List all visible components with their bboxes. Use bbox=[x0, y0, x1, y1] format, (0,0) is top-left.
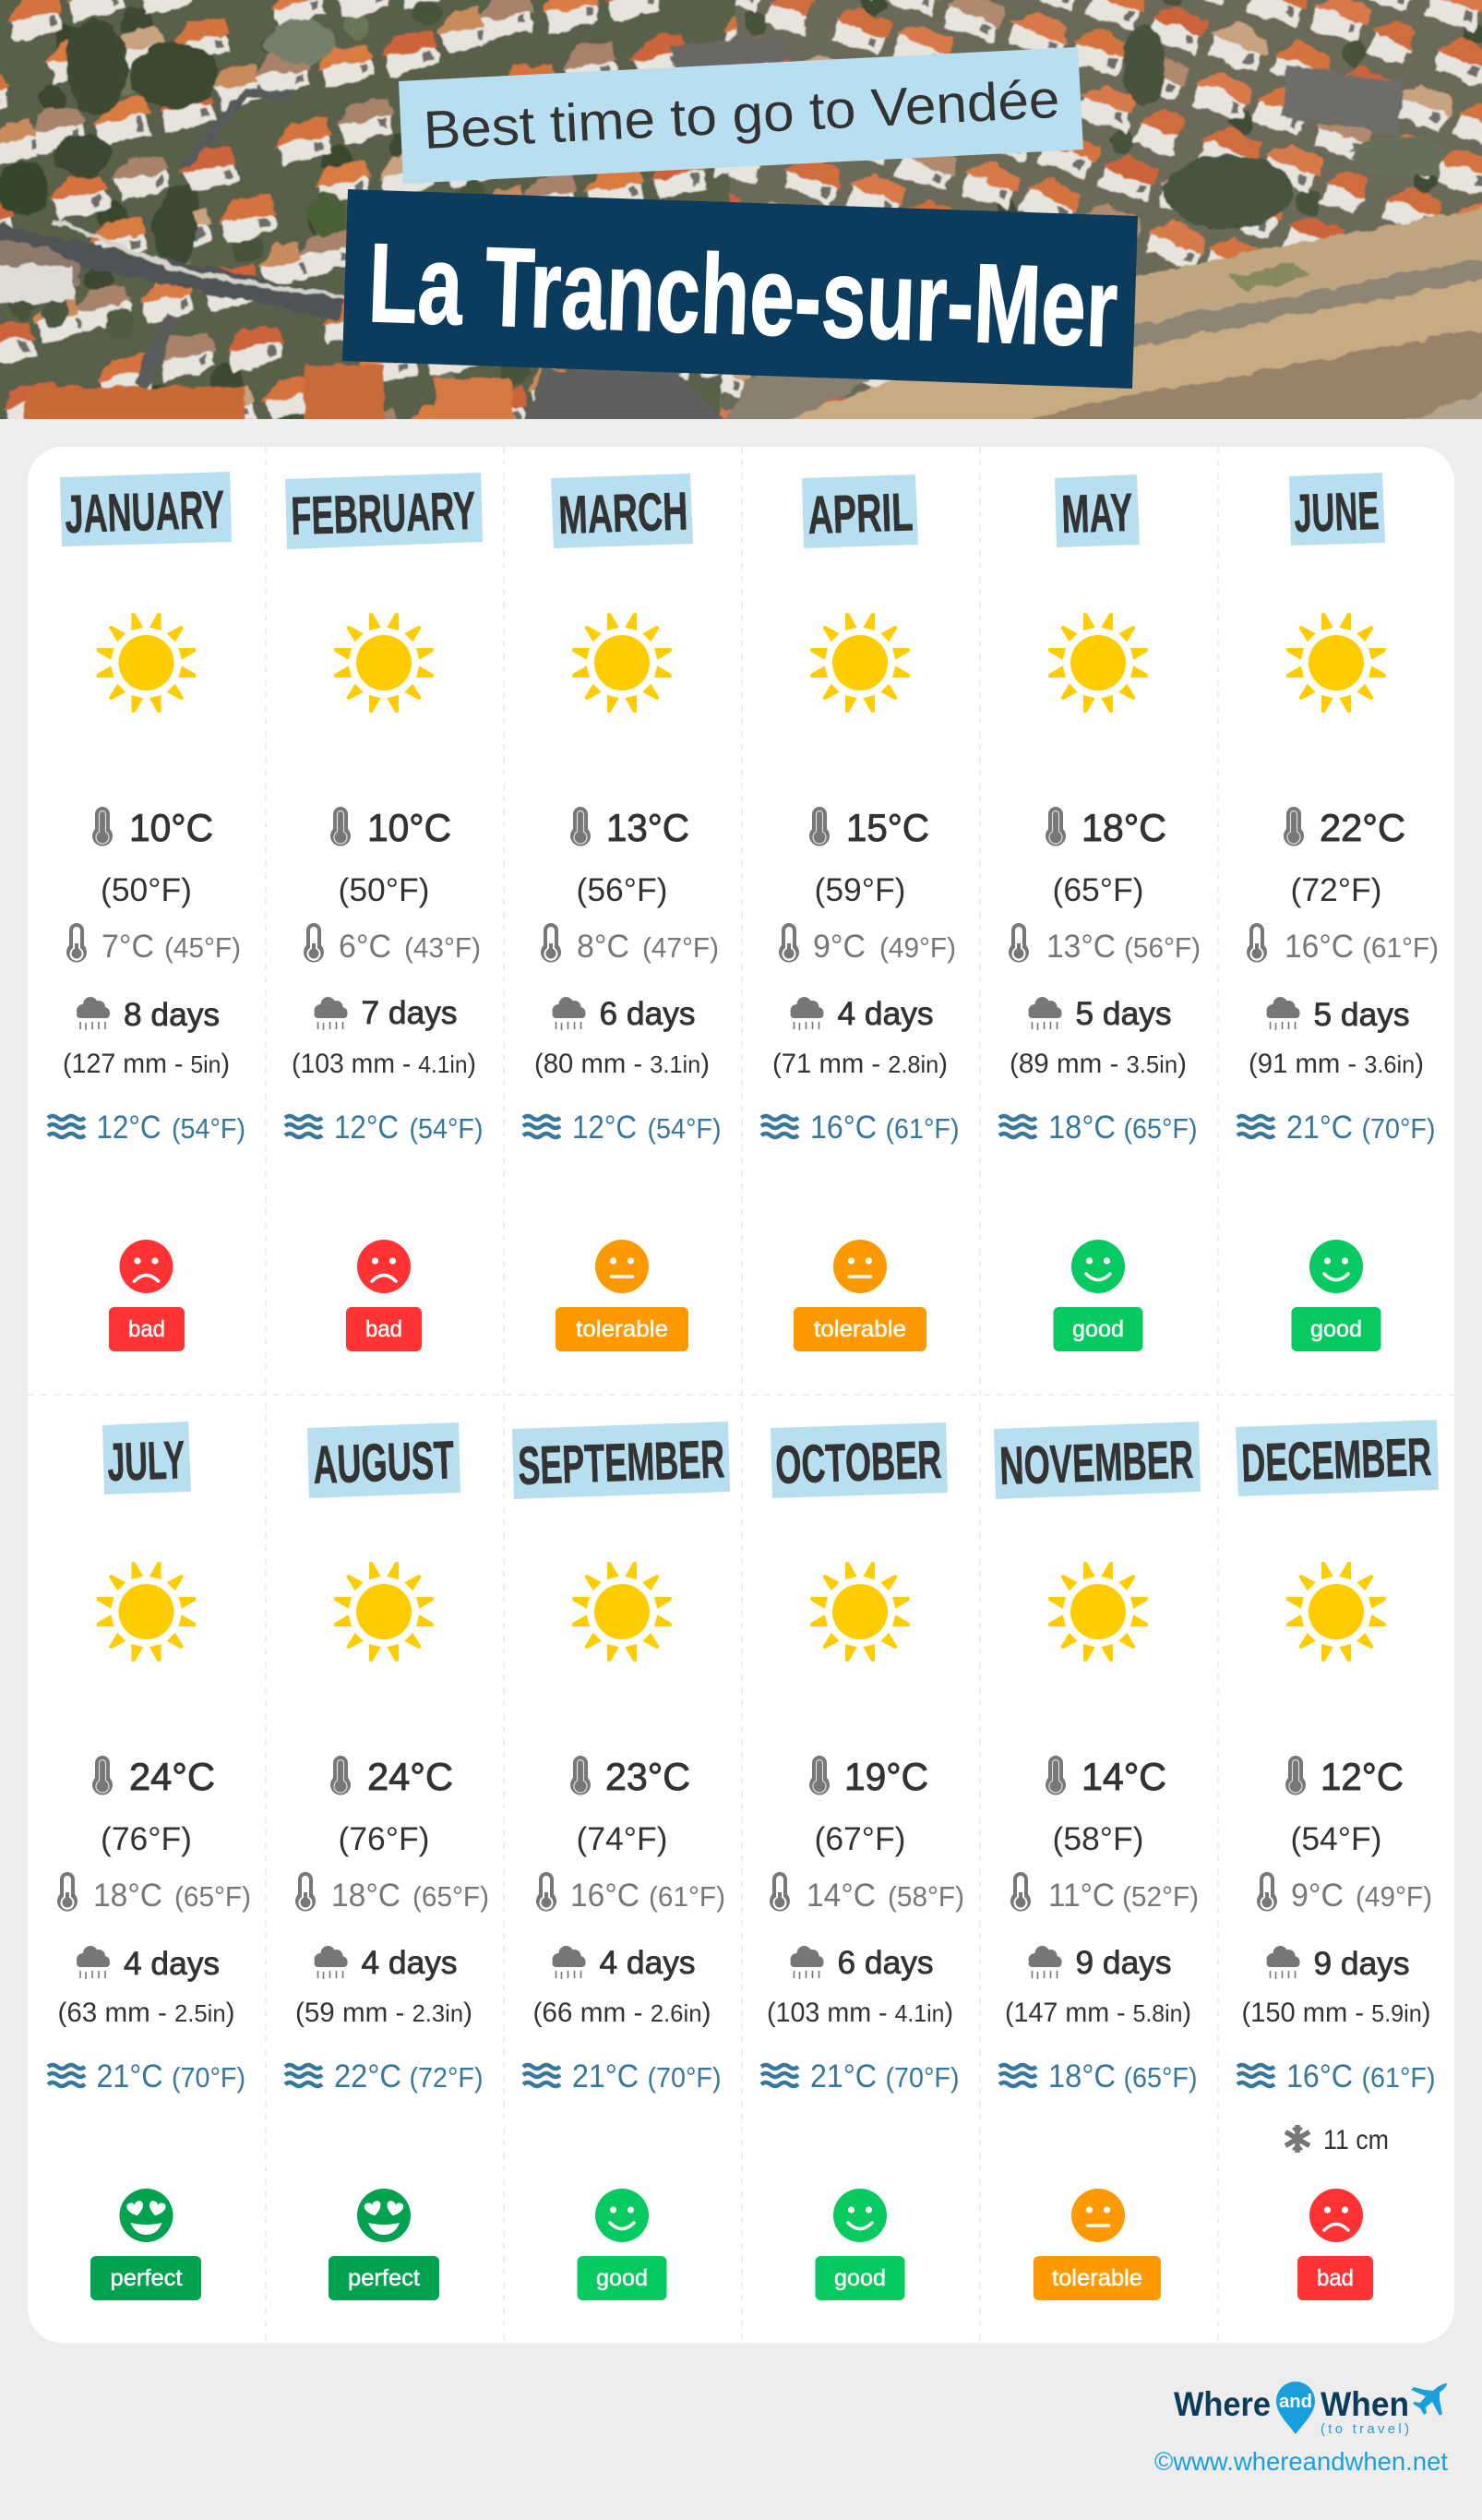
month heading bbox=[307, 1422, 460, 1498]
rainy days bbox=[77, 997, 220, 1033]
sea temperature bbox=[523, 2058, 722, 2094]
month heading bbox=[1055, 474, 1140, 547]
icon: thermometer bbox=[330, 1756, 351, 1795]
title banner: Best time to go to Vendée: Best time to go to Vendée bbox=[422, 69, 1061, 161]
sea temperature: 16°C bbox=[810, 1110, 877, 1146]
month heading: MAY bbox=[1060, 483, 1133, 545]
rating: good bbox=[816, 2189, 904, 2300]
rating: tolerable: tolerable bbox=[814, 1316, 906, 1342]
month heading bbox=[285, 473, 483, 549]
sea temperature: (70°F) bbox=[1362, 1112, 1436, 1145]
icon: sun bbox=[334, 1562, 434, 1662]
month heading bbox=[60, 472, 232, 546]
sea temperature: 16°C bbox=[1286, 2058, 1353, 2094]
rating: good: good bbox=[596, 2265, 648, 2291]
rainy days: 6 days bbox=[838, 1945, 934, 1981]
icon: sun bbox=[97, 613, 196, 713]
high temperature: 12°C bbox=[1321, 1755, 1404, 1798]
high temperature: 19°C bbox=[844, 1755, 928, 1798]
rainfall: (127 mm - 5in) bbox=[63, 1049, 230, 1079]
icon: thermometer bbox=[809, 1756, 830, 1795]
sea temperature bbox=[523, 1110, 722, 1146]
low temperature bbox=[1010, 1872, 1199, 1914]
rainy days: 5 days bbox=[1076, 996, 1172, 1032]
month heading: APRIL bbox=[807, 482, 914, 546]
low temperature bbox=[770, 1872, 964, 1914]
rainy days: 7 days bbox=[362, 995, 458, 1031]
rainy days bbox=[1028, 1945, 1172, 1981]
sea temperature: (70°F) bbox=[648, 2061, 722, 2094]
high temperature: 18°C bbox=[1082, 806, 1166, 849]
rainy days bbox=[790, 1945, 934, 1981]
high temperature Fahrenheit: (50°F) bbox=[101, 872, 192, 908]
panel: July bbox=[48, 1422, 251, 2300]
high temperature: 14°C bbox=[1082, 1755, 1166, 1798]
rainy days bbox=[77, 1946, 220, 1982]
copyright url: ©www.whereandwhen.net bbox=[1154, 2447, 1448, 2476]
low temperature: (61°F) bbox=[1362, 931, 1439, 964]
month heading: AUGUST bbox=[312, 1430, 455, 1495]
sea temperature: 18°C bbox=[1048, 2058, 1116, 2094]
low temperature bbox=[66, 923, 241, 965]
rating: perfect bbox=[90, 2189, 201, 2300]
logo: Where and When: (to travel) bbox=[1321, 2421, 1409, 2437]
high temperature Fahrenheit: (76°F) bbox=[101, 1821, 192, 1857]
icon: thermometer bbox=[1285, 1756, 1306, 1795]
low temperature: (58°F) bbox=[888, 1880, 964, 1913]
low temperature: (56°F) bbox=[1124, 931, 1201, 964]
rainfall: (63 mm - 2.5in) bbox=[57, 1998, 235, 2028]
sea temperature: (54°F) bbox=[648, 1112, 722, 1145]
month heading: SEPTEMBER bbox=[517, 1429, 725, 1496]
rating: bad bbox=[1297, 2189, 1373, 2300]
logo: Where and When: Where bbox=[1174, 2385, 1271, 2423]
panel: October bbox=[761, 1422, 964, 2300]
rating: bad: bad bbox=[365, 1316, 402, 1342]
icon: map pin: and bbox=[1279, 2392, 1312, 2412]
rating: perfect: perfect bbox=[111, 2265, 183, 2291]
low temperature bbox=[779, 923, 956, 965]
rainy days: 5 days bbox=[1314, 997, 1410, 1033]
rainfall: (80 mm - 3.1in) bbox=[534, 1049, 710, 1079]
rating: tolerable: tolerable bbox=[576, 1316, 668, 1342]
sea temperature bbox=[285, 2058, 484, 2094]
sea temperature bbox=[999, 2058, 1198, 2094]
sea temperature: 21°C bbox=[96, 2058, 162, 2094]
low temperature: 9°C bbox=[813, 929, 866, 965]
low temperature: 13°C bbox=[1046, 929, 1116, 965]
rainfall: (89 mm - 3.5in) bbox=[1010, 1049, 1187, 1079]
rainy days: 4 days bbox=[124, 1946, 220, 1982]
rating: tolerable bbox=[794, 1240, 926, 1351]
icon: sun bbox=[572, 1562, 672, 1662]
low temperature bbox=[57, 1872, 251, 1914]
icon: thermometer bbox=[809, 807, 830, 846]
sea temperature: (61°F) bbox=[886, 1112, 960, 1145]
panel: December bbox=[1236, 1420, 1439, 2300]
rating: good: good bbox=[834, 2265, 886, 2291]
sea temperature: 12°C bbox=[96, 1110, 161, 1146]
low temperature: (65°F) bbox=[412, 1880, 489, 1913]
icon: thermometer bbox=[1284, 807, 1304, 846]
title banner: La Tranche-sur-Mer bbox=[342, 189, 1138, 389]
rating: bad bbox=[346, 1240, 422, 1351]
sea temperature: 12°C bbox=[572, 1110, 637, 1146]
sea temperature: (61°F) bbox=[1362, 2061, 1436, 2094]
rainy days: 4 days bbox=[838, 996, 934, 1032]
high temperature Fahrenheit: (58°F) bbox=[1052, 1821, 1144, 1857]
rainfall: (66 mm - 2.6in) bbox=[533, 1998, 711, 2028]
rainy days: 8 days bbox=[124, 997, 220, 1033]
icon: sun bbox=[334, 613, 434, 713]
rainy days bbox=[314, 1945, 458, 1981]
high temperature: 10°C bbox=[367, 806, 451, 849]
month heading: JUNE bbox=[1293, 481, 1380, 544]
icon: thermometer bbox=[92, 807, 113, 846]
rating: good: good bbox=[1072, 1316, 1124, 1342]
sea temperature: (54°F) bbox=[410, 1112, 484, 1145]
month heading: FEBRUARY bbox=[290, 481, 476, 546]
month heading: JANUARY bbox=[64, 480, 225, 545]
month heading bbox=[102, 1422, 191, 1494]
rating: bad: bad bbox=[1317, 2265, 1354, 2291]
sea temperature bbox=[1237, 1110, 1436, 1146]
sea temperature: (70°F) bbox=[172, 2061, 245, 2094]
sea temperature: (54°F) bbox=[172, 1112, 245, 1145]
panel: February bbox=[285, 473, 484, 1351]
low temperature: (61°F) bbox=[649, 1880, 725, 1913]
low temperature: 11°C bbox=[1048, 1878, 1115, 1914]
rating: perfect bbox=[329, 2189, 439, 2300]
high temperature Fahrenheit: (54°F) bbox=[1290, 1821, 1382, 1857]
low temperature: 14°C bbox=[807, 1878, 876, 1914]
month heading bbox=[551, 474, 693, 548]
sea temperature bbox=[48, 1110, 245, 1146]
low temperature: (43°F) bbox=[404, 931, 481, 964]
month heading bbox=[994, 1422, 1201, 1499]
panel: June bbox=[1237, 473, 1439, 1351]
sea temperature bbox=[761, 1110, 960, 1146]
low temperature: 7°C bbox=[102, 929, 154, 965]
sea temperature: 21°C bbox=[810, 2058, 877, 2094]
high temperature Fahrenheit: (76°F) bbox=[338, 1821, 430, 1857]
month heading: JULY bbox=[106, 1430, 185, 1493]
sea temperature bbox=[999, 1110, 1198, 1146]
low temperature bbox=[295, 1872, 489, 1914]
sea temperature: 21°C bbox=[1286, 1110, 1353, 1146]
icon: sun bbox=[572, 613, 672, 713]
low temperature: (65°F) bbox=[174, 1880, 251, 1913]
rainy days: 4 days bbox=[362, 1945, 458, 1981]
icon: sun bbox=[810, 1562, 910, 1662]
title banner: La Tranche-sur-Mer: La Tranche-sur-Mer bbox=[366, 220, 1119, 370]
icon: sun bbox=[1286, 1562, 1386, 1662]
panel: September bbox=[512, 1422, 730, 2300]
snowfall: 11 cm bbox=[1323, 2125, 1389, 2155]
low temperature: 16°C bbox=[1285, 929, 1354, 965]
rainy days: 4 days bbox=[600, 1945, 696, 1981]
high temperature: 15°C bbox=[846, 806, 929, 849]
high temperature: 24°C bbox=[367, 1755, 453, 1798]
low temperature: (49°F) bbox=[1356, 1880, 1432, 1913]
rating: bad: bad bbox=[128, 1316, 165, 1342]
icon: map pin bbox=[1276, 2382, 1315, 2434]
low temperature bbox=[541, 923, 719, 965]
low temperature bbox=[1247, 923, 1439, 965]
rainy days bbox=[314, 995, 458, 1031]
sea temperature bbox=[1237, 2058, 1436, 2094]
rainfall: (91 mm - 3.6in) bbox=[1249, 1049, 1424, 1079]
panel: November bbox=[994, 1422, 1201, 2300]
sea temperature bbox=[761, 2058, 960, 2094]
rainfall: (147 mm - 5.8in) bbox=[1005, 1998, 1191, 2028]
rating: tolerable bbox=[556, 1240, 688, 1351]
rainy days bbox=[790, 996, 934, 1032]
rainfall: (150 mm - 5.9in) bbox=[1242, 1998, 1430, 2028]
rating: good: good bbox=[1310, 1316, 1362, 1342]
panel: March bbox=[523, 474, 722, 1351]
low temperature: 18°C bbox=[331, 1878, 400, 1914]
low temperature: (49°F) bbox=[879, 931, 956, 964]
rating: tolerable bbox=[1034, 2189, 1161, 2300]
panel: April bbox=[761, 474, 960, 1351]
sea temperature bbox=[48, 2058, 245, 2094]
low temperature: 6°C bbox=[339, 929, 391, 965]
icon: thermometer bbox=[1046, 1756, 1066, 1795]
high temperature Fahrenheit: (65°F) bbox=[1052, 872, 1144, 908]
panel: months grid card bbox=[28, 447, 1454, 2343]
rainy days bbox=[552, 1945, 696, 1981]
high temperature: 24°C bbox=[129, 1755, 215, 1798]
rainfall: (59 mm - 2.3in) bbox=[295, 1998, 472, 2028]
rainy days bbox=[1266, 997, 1410, 1033]
sea temperature: 22°C bbox=[334, 2058, 401, 2094]
sea temperature: 12°C bbox=[334, 1110, 399, 1146]
month heading bbox=[802, 474, 918, 548]
sea temperature: 21°C bbox=[572, 2058, 639, 2094]
icon: thermometer bbox=[330, 807, 351, 846]
sea temperature bbox=[285, 1110, 484, 1146]
rainy days bbox=[1028, 996, 1172, 1032]
month heading: MARCH bbox=[557, 481, 688, 546]
rainy days bbox=[1266, 1946, 1410, 1982]
rainfall: (103 mm - 4.1in) bbox=[292, 1049, 476, 1079]
rainfall: (103 mm - 4.1in) bbox=[767, 1998, 953, 2028]
low temperature bbox=[1009, 923, 1201, 965]
high temperature Fahrenheit: (67°F) bbox=[814, 1821, 906, 1857]
panel: January bbox=[48, 472, 245, 1351]
panel: May bbox=[999, 474, 1201, 1351]
low temperature: 9°C bbox=[1291, 1878, 1344, 1914]
low temperature: 8°C bbox=[577, 929, 629, 965]
month heading bbox=[512, 1422, 730, 1499]
icon: sun bbox=[1048, 613, 1148, 713]
sea temperature: (65°F) bbox=[1124, 1112, 1198, 1145]
low temperature bbox=[304, 923, 481, 965]
icon: thermometer bbox=[1046, 807, 1066, 846]
rating: tolerable: tolerable bbox=[1052, 2265, 1142, 2291]
high temperature: 22°C bbox=[1320, 806, 1405, 849]
low temperature: 16°C bbox=[570, 1878, 639, 1914]
month heading: OCTOBER bbox=[774, 1430, 942, 1495]
icon: sun bbox=[1286, 613, 1386, 713]
rating: good bbox=[578, 2189, 666, 2300]
icon: sun bbox=[810, 613, 910, 713]
logo: Where and When: When bbox=[1321, 2385, 1409, 2423]
high temperature Fahrenheit: (59°F) bbox=[814, 872, 906, 908]
high temperature Fahrenheit: (72°F) bbox=[1290, 872, 1382, 908]
rainfall: (71 mm - 2.8in) bbox=[772, 1049, 948, 1079]
rating: perfect: perfect bbox=[348, 2265, 420, 2291]
icon: thermometer bbox=[570, 807, 591, 846]
rating: good bbox=[1292, 1240, 1380, 1351]
rating: good bbox=[1054, 1240, 1142, 1351]
icon: thermometer bbox=[570, 1756, 591, 1795]
high temperature Fahrenheit: (74°F) bbox=[576, 1821, 668, 1857]
sea temperature: (70°F) bbox=[886, 2061, 960, 2094]
icon: plane bbox=[1411, 2383, 1447, 2416]
rating: bad bbox=[109, 1240, 185, 1351]
rainy days bbox=[552, 996, 696, 1032]
title banner: Best time to go to Vendée bbox=[399, 47, 1083, 184]
month heading bbox=[771, 1422, 948, 1498]
rainy days: 9 days bbox=[1076, 1945, 1172, 1981]
high temperature: 10°C bbox=[129, 806, 213, 849]
rainy days: 9 days bbox=[1314, 1946, 1410, 1982]
rainy days: 6 days bbox=[600, 996, 696, 1032]
aerial photo of the town and beach bbox=[0, 0, 1482, 452]
panel: August bbox=[285, 1422, 489, 2300]
low temperature bbox=[1257, 1872, 1432, 1914]
logo: Where and When bbox=[1174, 2382, 1447, 2437]
sea temperature: (72°F) bbox=[410, 2061, 484, 2094]
month heading: NOVEMBER bbox=[998, 1430, 1194, 1496]
low temperature bbox=[536, 1872, 725, 1914]
high temperature Fahrenheit: (50°F) bbox=[338, 872, 430, 908]
icon: sun bbox=[1048, 1562, 1148, 1662]
icon: thermometer bbox=[92, 1756, 113, 1795]
low temperature: (52°F) bbox=[1122, 1880, 1199, 1913]
low temperature: 18°C bbox=[93, 1878, 162, 1914]
sea temperature: (65°F) bbox=[1124, 2061, 1198, 2094]
sea temperature: 18°C bbox=[1048, 1110, 1116, 1146]
month heading bbox=[1289, 473, 1385, 546]
high temperature: 23°C bbox=[605, 1755, 690, 1798]
low temperature: (47°F) bbox=[642, 931, 719, 964]
snowfall bbox=[1285, 2125, 1389, 2155]
icon: sun bbox=[97, 1562, 196, 1662]
low temperature: (45°F) bbox=[164, 931, 241, 964]
high temperature: 13°C bbox=[606, 806, 689, 849]
high temperature Fahrenheit: (56°F) bbox=[576, 872, 668, 908]
